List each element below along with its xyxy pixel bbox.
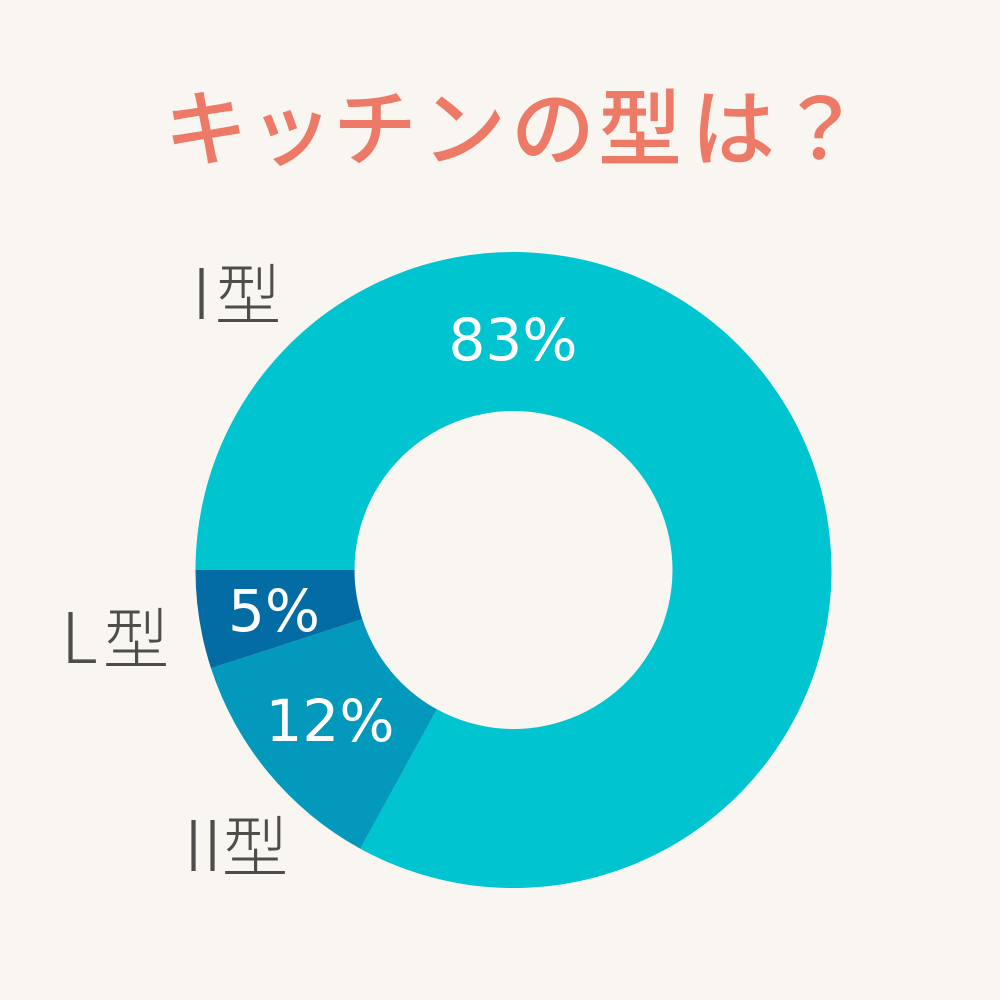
segment: II型 12% — [211, 619, 437, 849]
category label: II型: 型 — [222, 795, 288, 891]
donut chart — [195, 252, 832, 888]
category label: L型: 型 — [103, 587, 169, 683]
value label: 83%: 83% — [449, 306, 577, 374]
value label: 5%: 5% — [228, 577, 320, 645]
title: キッチンの型は？ — [164, 63, 862, 184]
value label: 12%: 12% — [266, 687, 394, 755]
segment: L型 5% — [195, 570, 362, 668]
category label: L型: L — [61, 583, 98, 684]
category label: II型: II — [184, 791, 222, 892]
category label: I型: 型 — [215, 243, 281, 339]
segment: I型 83% — [196, 252, 832, 888]
category label: I型: I — [192, 239, 211, 340]
